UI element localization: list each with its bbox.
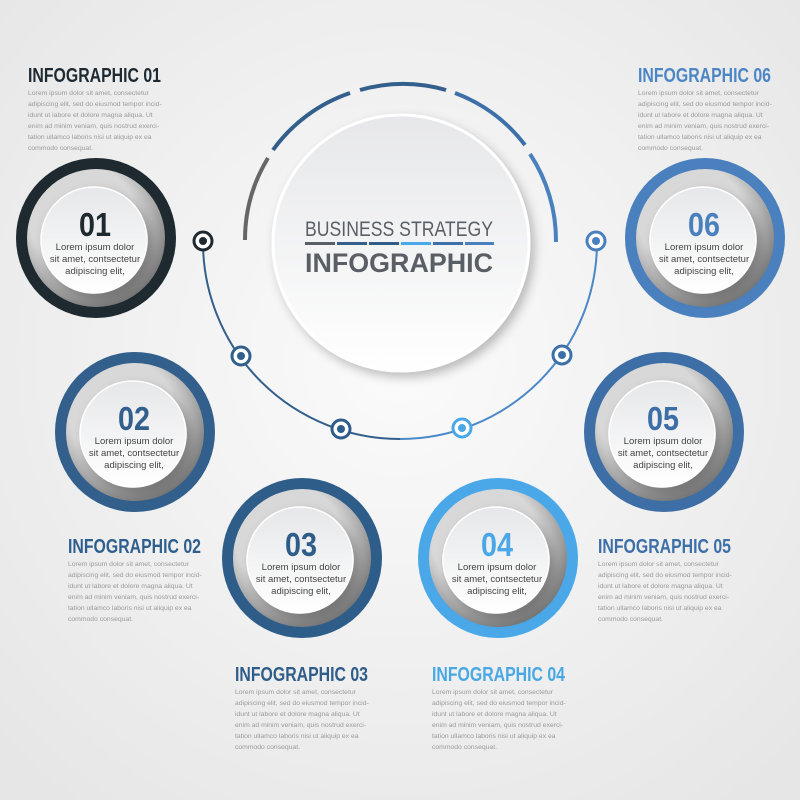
circle 06: sit amet, contsectetur xyxy=(659,254,749,265)
text block 04: Lorem ipsum dolor sit amet, consectetur xyxy=(432,689,554,696)
circle 04: adipiscing elit, xyxy=(467,586,527,597)
circle 06: 06 xyxy=(688,206,720,243)
circle 05: 05 xyxy=(647,400,679,437)
text block 06: enim ad minim veniam, quis nostrud exerci- xyxy=(638,123,769,130)
text block 01: enim ad minim veniam, quis nostrud exerci- xyxy=(28,123,159,130)
text block 04 xyxy=(432,664,566,751)
text block 01: Lorem ipsum dolor sit amet, consectetur xyxy=(28,90,150,97)
circle 03: 03 xyxy=(285,526,317,563)
text block 06: tation ullamco laboris nisi ut aliquip ex ea xyxy=(638,134,762,141)
circle 04: Lorem ipsum dolor xyxy=(458,562,536,573)
text block 03: commodo consequat. xyxy=(235,744,300,751)
circle 02 xyxy=(55,352,215,512)
text block 03: enim ad minim veniam, quis nostrud exerci- xyxy=(235,722,366,729)
text block 02: Lorem ipsum dolor sit amet, consectetur xyxy=(68,561,190,568)
circle 01 xyxy=(16,158,176,318)
circle 02: 02 xyxy=(118,400,150,437)
text block 05: Lorem ipsum dolor sit amet, consectetur xyxy=(598,561,720,568)
text block 03: INFOGRAPHIC 03 xyxy=(235,664,368,686)
text block 05: idunt ut labore et dolore magna aliqua. Ut xyxy=(598,583,723,590)
circle 02: adipiscing elit, xyxy=(104,460,164,471)
text block 02: INFOGRAPHIC 02 xyxy=(68,536,201,558)
text block 01: commodo consequat. xyxy=(28,145,93,152)
central circle: BUSINESS STRATEGY xyxy=(305,218,493,241)
central circle: INFOGRAPHIC xyxy=(305,248,493,278)
text block 02: idunt ut labore et dolore magna aliqua. Ut xyxy=(68,583,193,590)
text block 06: idunt ut labore et dolore magna aliqua. Ut xyxy=(638,112,763,119)
text block 01: adipiscing elit, sed do eiusmod tempor incid- xyxy=(28,101,162,108)
text block 05: tation ullamco laboris nisi ut aliquip ex ea xyxy=(598,605,722,612)
text block 02: enim ad minim veniam, quis nostrud exerci- xyxy=(68,594,199,601)
text block 04: commodo consequat. xyxy=(432,744,497,751)
text block 01: idunt ut labore et dolore magna aliqua. Ut xyxy=(28,112,153,119)
connector nodes xyxy=(194,232,605,438)
text block 05: enim ad minim veniam, quis nostrud exerci- xyxy=(598,594,729,601)
circle 02: sit amet, contsectetur xyxy=(89,448,179,459)
circle 03: Lorem ipsum dolor xyxy=(262,562,340,573)
circle 01: adipiscing elit, xyxy=(65,266,125,277)
text block 04: adipiscing elit, sed do eiusmod tempor incid- xyxy=(432,700,566,707)
text block 06 xyxy=(638,65,772,152)
circle 05 xyxy=(584,352,744,512)
text block 04: idunt ut labore et dolore magna aliqua. Ut xyxy=(432,711,557,718)
text block 03: idunt ut labore et dolore magna aliqua. Ut xyxy=(235,711,360,718)
circle 01: 01 xyxy=(79,206,111,243)
text block 05: INFOGRAPHIC 05 xyxy=(598,536,731,558)
circle 05: Lorem ipsum dolor xyxy=(624,436,702,447)
text block 03 xyxy=(235,664,369,751)
circle 06 xyxy=(625,158,785,318)
circle 06: Lorem ipsum dolor xyxy=(665,242,743,253)
text block 02 xyxy=(68,536,202,623)
text block 01: INFOGRAPHIC 01 xyxy=(28,65,161,87)
text block 03: adipiscing elit, sed do eiusmod tempor incid- xyxy=(235,700,369,707)
circle 03: adipiscing elit, xyxy=(271,586,331,597)
central circle xyxy=(273,115,529,371)
circle 03: sit amet, contsectetur xyxy=(256,574,346,585)
text block 03: Lorem ipsum dolor sit amet, consectetur xyxy=(235,689,357,696)
outer dashed arc xyxy=(245,84,556,242)
text block 05: adipiscing elit, sed do eiusmod tempor incid- xyxy=(598,572,732,579)
circle 04: sit amet, contsectetur xyxy=(452,574,542,585)
text block 05 xyxy=(598,536,732,623)
circle 01: sit amet, contsectetur xyxy=(50,254,140,265)
circle 04: 04 xyxy=(481,526,514,563)
circle 06: adipiscing elit, xyxy=(674,266,734,277)
text block 02: adipiscing elit, sed do eiusmod tempor incid- xyxy=(68,572,202,579)
lower connector arc xyxy=(203,242,597,439)
circle 02: Lorem ipsum dolor xyxy=(95,436,173,447)
circle 03 xyxy=(222,478,382,638)
circle 05: sit amet, contsectetur xyxy=(618,448,708,459)
text block 06: Lorem ipsum dolor sit amet, consectetur xyxy=(638,90,760,97)
text block 02: commodo consequat. xyxy=(68,616,133,623)
text block 01 xyxy=(28,65,162,152)
text block 05: commodo consequat. xyxy=(598,616,663,623)
text block 03: tation ullamco laboris nisi ut aliquip ex ea xyxy=(235,733,359,740)
circle 04 xyxy=(418,478,578,638)
text block 06: adipiscing elit, sed do eiusmod tempor incid- xyxy=(638,101,772,108)
text block 04: INFOGRAPHIC 04 xyxy=(432,664,566,686)
text block 04: enim ad minim veniam, quis nostrud exerci- xyxy=(432,722,563,729)
text block 06: commodo consequat. xyxy=(638,145,703,152)
text block 04: tation ullamco laboris nisi ut aliquip ex ea xyxy=(432,733,556,740)
text block 02: tation ullamco laboris nisi ut aliquip ex ea xyxy=(68,605,192,612)
circle 01: Lorem ipsum dolor xyxy=(56,242,134,253)
circle 05: adipiscing elit, xyxy=(633,460,693,471)
text block 01: tation ullamco laboris nisi ut aliquip ex ea xyxy=(28,134,152,141)
